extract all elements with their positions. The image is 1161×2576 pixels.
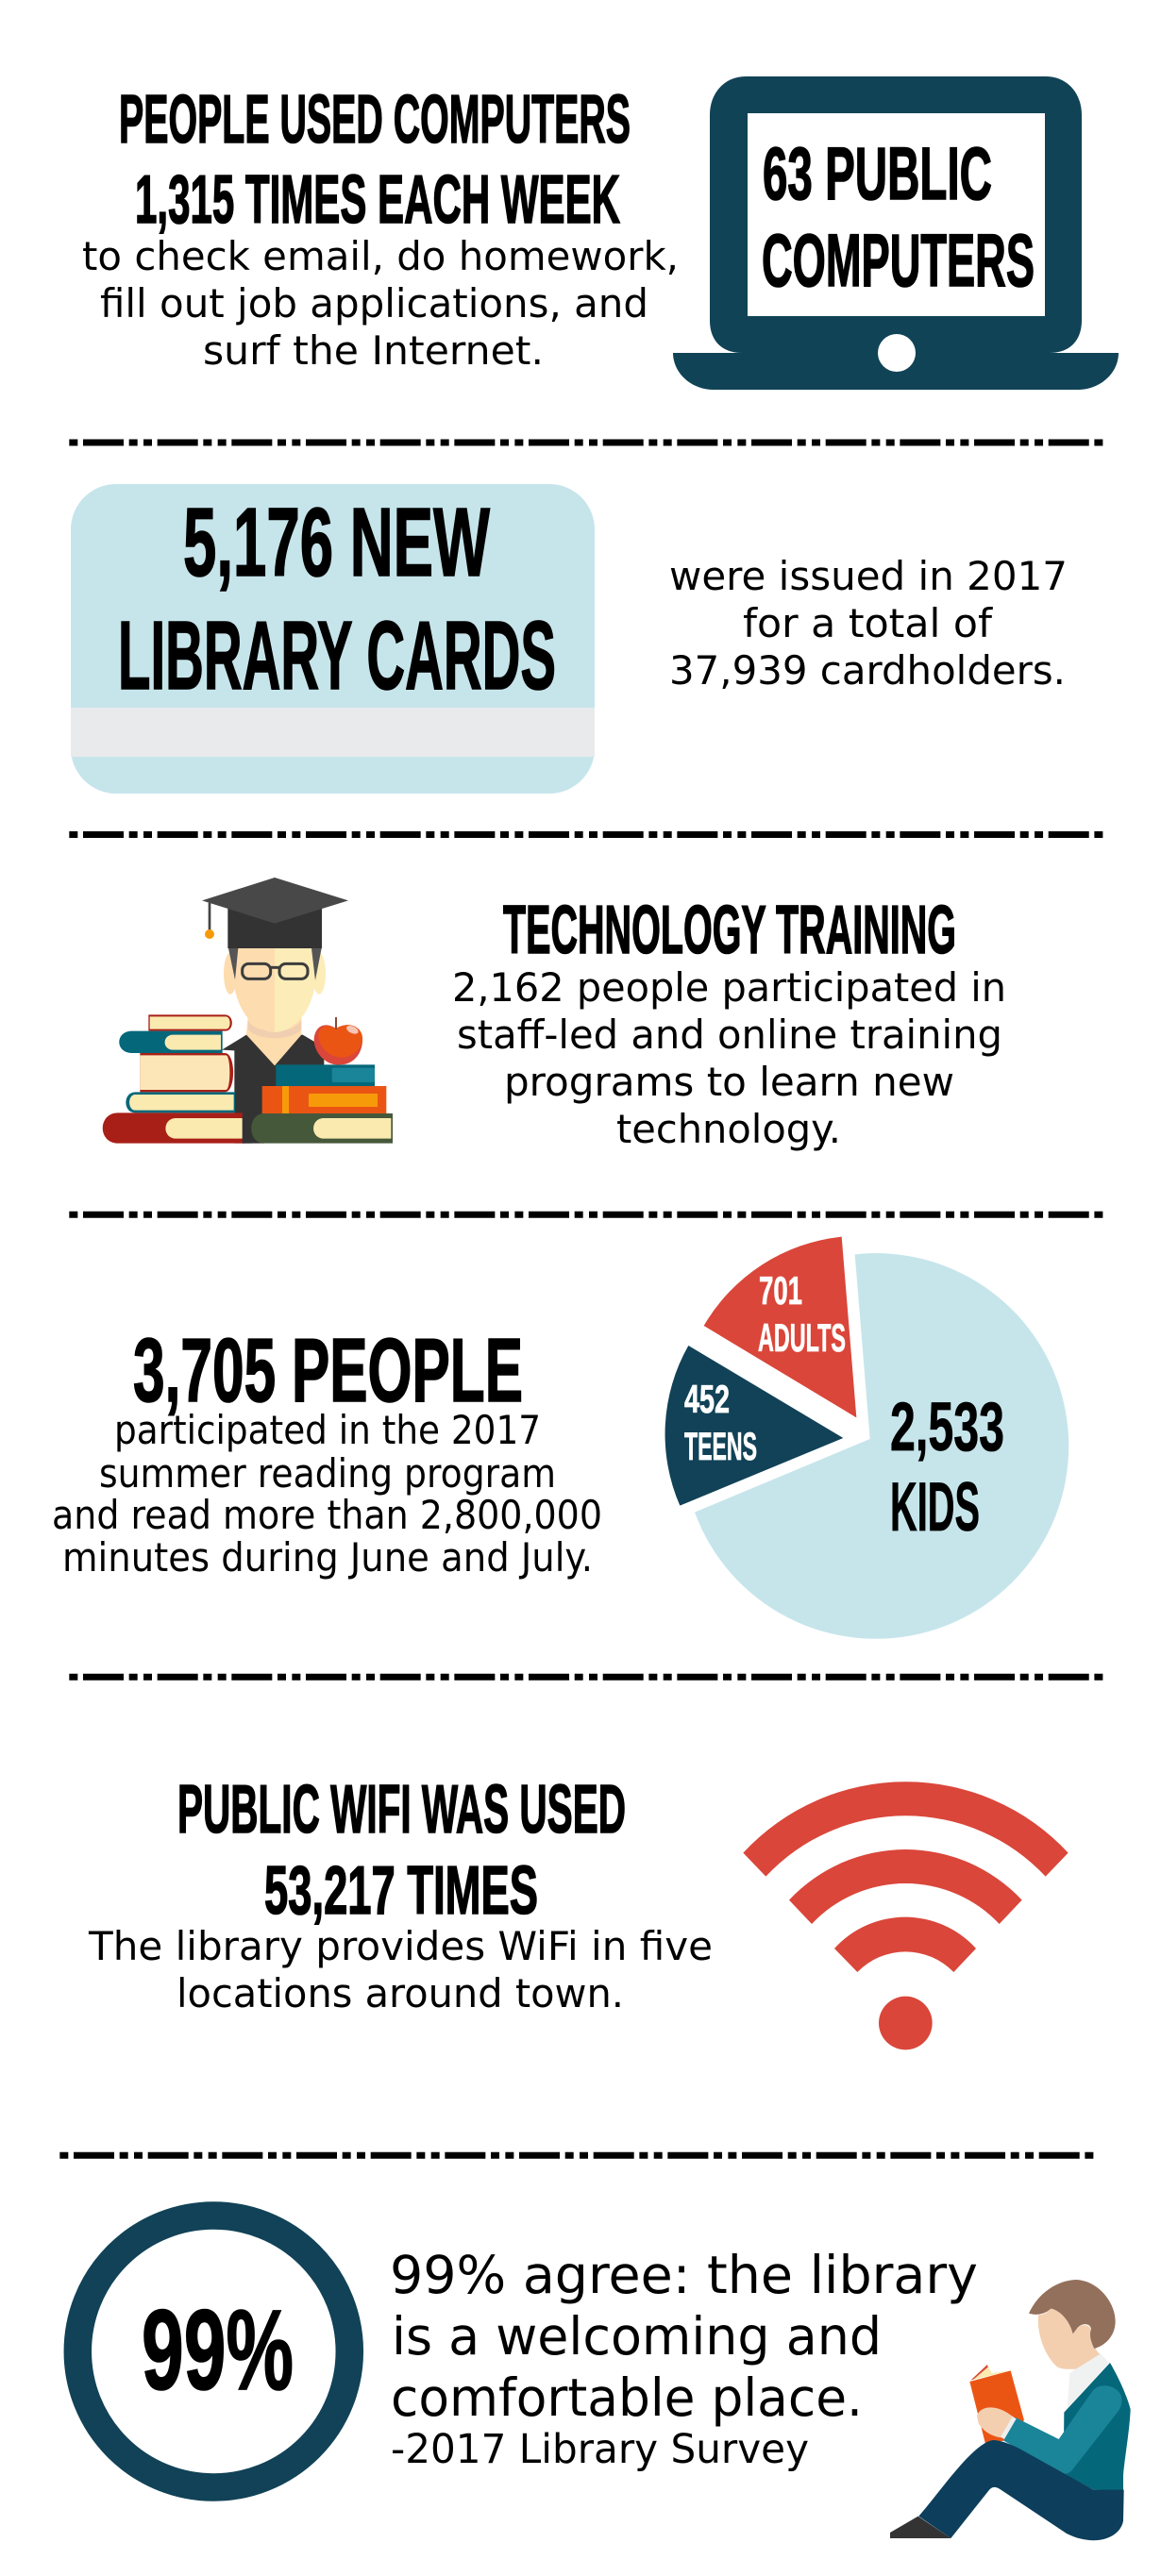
text block: summer reading program: and read more than 2,800,000 xyxy=(52,1492,602,1538)
label: 701 adults xyxy=(758,1268,846,1360)
label: 2,533 kids: KIDS xyxy=(890,1469,980,1546)
text block: training participants: 2,162 people participated in xyxy=(452,964,1006,1011)
text block: computer uses: fill out job applications, and xyxy=(100,280,648,326)
text block: training participants xyxy=(452,964,1006,1152)
label: 452 teens: 452 xyxy=(684,1377,730,1421)
icon: wifi xyxy=(743,1781,1068,2049)
ring: 99 percent: 99% xyxy=(142,2285,294,2414)
heading: people used computers: PEOPLE USED COMPUTERS xyxy=(119,81,631,158)
text block: survey quote: 99% agree: the library xyxy=(390,2245,978,2305)
text block: survey quote: comfortable place. xyxy=(391,2367,863,2428)
label: 452 teens xyxy=(684,1377,757,1468)
text block: wifi locations: locations around town. xyxy=(177,1970,624,2016)
text block: computer uses: to check email, do homework, xyxy=(82,233,679,279)
pie chart: participants by age xyxy=(665,1237,1068,1639)
text block: training participants: staff-led and online training xyxy=(457,1012,1002,1058)
icon: library card xyxy=(71,484,595,794)
text block: wifi locations: The library provides WiFi in five xyxy=(88,1923,713,1969)
text block: summer reading program: participated in the 2017 xyxy=(114,1407,541,1453)
icon: person reading xyxy=(890,2280,1131,2540)
heading: 3,705 people: 3,705 PEOPLE xyxy=(133,1320,523,1421)
label: 2,533 kids xyxy=(890,1389,1004,1546)
text block: wifi locations xyxy=(88,1923,713,2016)
heading: public wifi: PUBLIC WIFI WAS USED xyxy=(177,1771,626,1848)
text block: computer uses: surf the Internet. xyxy=(203,327,544,374)
text block: cardholders: for a total of xyxy=(743,600,993,646)
text block: summer reading program: minutes during June and July. xyxy=(62,1534,593,1581)
heading: people used computers xyxy=(119,81,631,238)
text block: survey quote: -2017 Library Survey xyxy=(391,2426,809,2473)
panel: survey xyxy=(77,2216,1131,2540)
text block: cardholders xyxy=(669,553,1068,694)
label: 452 teens: TEENS xyxy=(684,1424,757,1468)
icon: library card: 5,176 NEW xyxy=(183,488,490,596)
text block: training participants: technology. xyxy=(616,1106,841,1152)
panel: library cards xyxy=(71,484,1068,794)
text block: summer reading program: summer reading program xyxy=(99,1450,556,1497)
panel: public wifi xyxy=(88,1771,1068,2049)
panel: public computers xyxy=(82,76,1119,390)
icon: library card: LIBRARY CARDS xyxy=(118,601,556,710)
text block: cardholders: 37,939 cardholders. xyxy=(669,647,1066,694)
ring: 99 percent xyxy=(77,2216,349,2487)
heading: public wifi: 53,217 TIMES xyxy=(264,1852,538,1929)
label: 701 adults: 701 xyxy=(759,1268,802,1313)
heading: people used computers: 1,315 TIMES EACH WEEK xyxy=(135,161,620,238)
text block: survey quote xyxy=(390,2245,978,2473)
text block: computer uses xyxy=(82,233,679,374)
pie slice: kids xyxy=(695,1253,1068,1639)
icon: laptop xyxy=(673,76,1119,390)
heading: public wifi xyxy=(177,1771,626,1929)
text block: summer reading program xyxy=(52,1407,602,1581)
panel: summer reading xyxy=(52,1237,1068,1639)
icon: graduate with books xyxy=(103,878,393,1144)
text block: training participants: programs to learn new xyxy=(504,1059,954,1105)
text block: cardholders: were issued in 2017 xyxy=(669,553,1068,599)
pie slice: adults xyxy=(704,1237,856,1417)
label: 2,533 kids: 2,533 xyxy=(890,1389,1004,1465)
panel: technology training xyxy=(103,878,1006,1152)
pie slice: teens xyxy=(665,1346,843,1506)
icon: laptop: 63 PUBLIC xyxy=(763,131,992,215)
label: 701 adults: ADULTS xyxy=(758,1315,846,1360)
text block: survey quote: is a welcoming and xyxy=(392,2306,882,2367)
